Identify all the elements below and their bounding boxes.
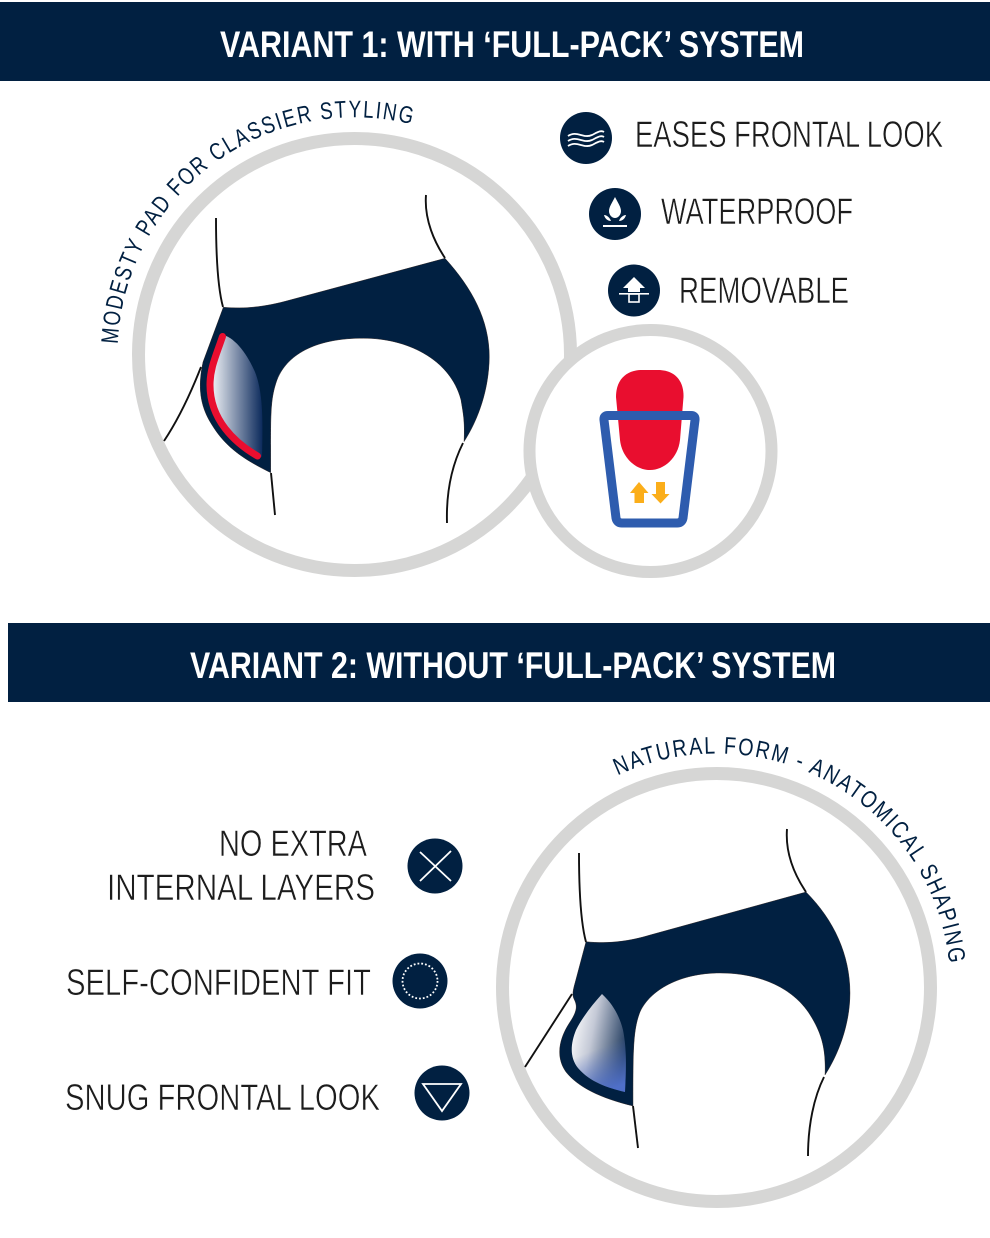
briefs shape	[200, 258, 489, 473]
yellow down arrow	[652, 482, 670, 504]
feature: waterproof: WATERPROOF	[661, 191, 853, 232]
banner: variant 1	[0, 2, 990, 81]
feature: snug frontal look: SNUG FRONTAL LOOK	[65, 1077, 380, 1118]
icon: dotted ring	[392, 954, 448, 1008]
feature: removable	[608, 264, 849, 316]
feature: no extra internal layers: INTERNAL LAYERS	[107, 867, 375, 908]
icon: triangle	[414, 1066, 470, 1120]
big grey ring	[138, 138, 570, 570]
feature: self-confident fit: SELF-CONFIDENT FIT	[66, 962, 371, 1003]
modesty pad gradient	[211, 335, 262, 457]
banner: variant 2	[8, 623, 990, 702]
panel: removable pad inset	[530, 330, 772, 572]
heading: variant 1: VARIANT 1: WITH ‘FULL-PACK’ SYSTEM	[220, 24, 804, 65]
icon: water drop	[589, 188, 641, 240]
big grey ring	[502, 774, 930, 1202]
blue pocket	[604, 416, 695, 523]
feature: waterproof	[589, 188, 853, 240]
red pad line	[210, 336, 258, 456]
curved caption: natural form: NATURAL FORM - ANATOMICAL SHAPING	[612, 737, 965, 962]
curved caption: modesty pad: MODESTY PAD FOR CLASSIER STYLING	[101, 100, 413, 343]
heading: variant 2: VARIANT 2: WITHOUT ‘FULL-PACK’ SYSTEM	[190, 645, 836, 686]
feature: eases frontal look	[560, 112, 943, 164]
natural pad gradient	[572, 994, 626, 1092]
icon: cross	[408, 838, 462, 894]
feature: no extra internal layers	[107, 823, 462, 908]
icon: waves	[560, 112, 612, 164]
red pad	[616, 370, 684, 470]
small grey ring	[530, 330, 772, 572]
yellow up arrow	[630, 482, 648, 503]
pad blue shading	[572, 994, 626, 1092]
body outline lines	[164, 195, 463, 523]
icon: arrow out of pocket	[608, 264, 660, 316]
briefs shape	[560, 892, 850, 1106]
feature: no extra internal layers: NO EXTRA	[219, 823, 367, 864]
panel: variant 2 brief diagram	[502, 774, 930, 1202]
panel: variant 1 brief diagram	[138, 138, 570, 570]
body outline lines	[525, 829, 824, 1156]
feature: removable: REMOVABLE	[679, 270, 849, 311]
